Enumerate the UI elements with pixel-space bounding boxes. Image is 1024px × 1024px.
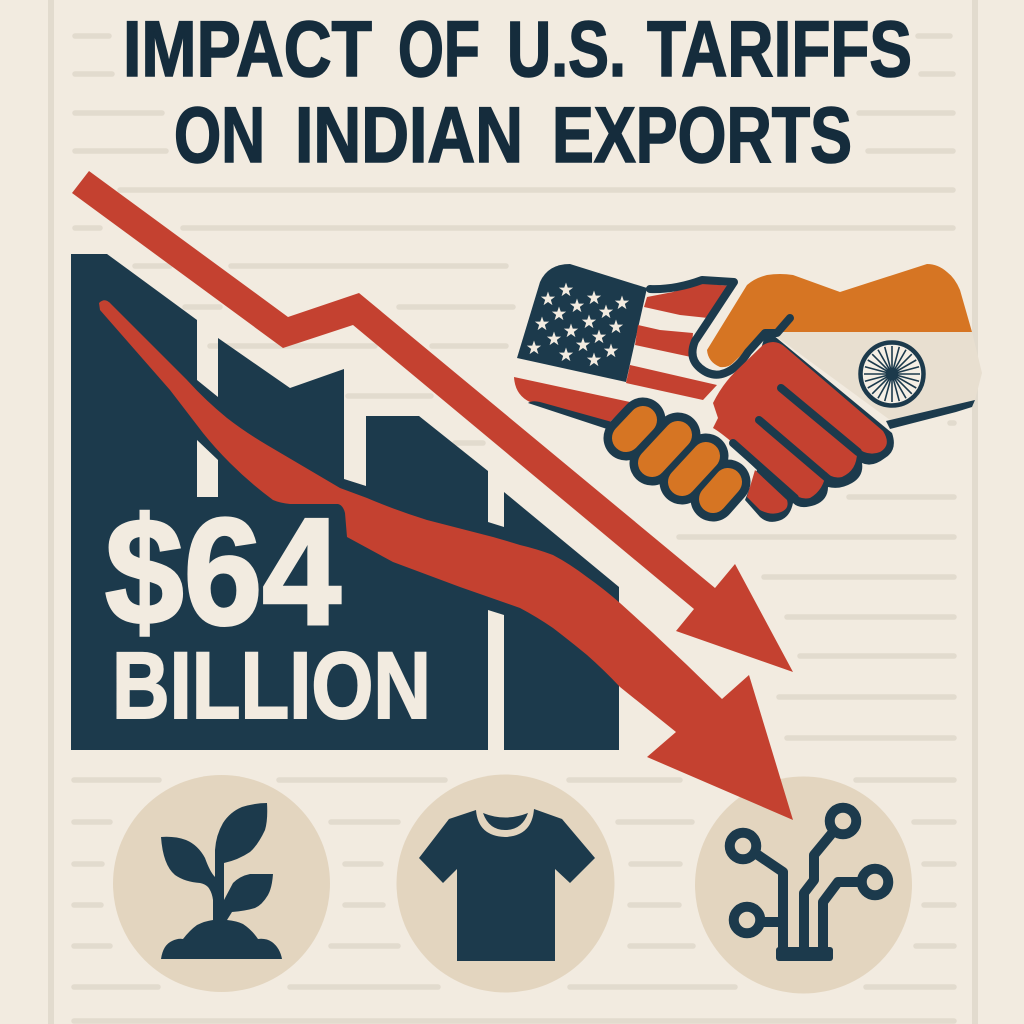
title: ON [174, 90, 265, 179]
title [123, 4, 912, 179]
title: INDIAN [295, 90, 523, 179]
right cuff line [886, 400, 975, 429]
Ashoka chakra wheel [860, 342, 924, 406]
arrow: upper falling trend line [72, 171, 793, 672]
US flag stars [527, 282, 629, 366]
big number: $64 billion: $64 [105, 487, 341, 657]
title: IMPACT [123, 4, 372, 93]
title: U.S. [507, 4, 626, 93]
title: OF [398, 4, 480, 93]
India hand lower finger [747, 470, 788, 514]
icon: electronics circuit [695, 776, 912, 994]
big number: $64 billion: BILLION [112, 633, 431, 739]
illustration: U.S.-India handshake [514, 264, 982, 522]
India flag sleeve: saffron band [707, 264, 972, 367]
US flag red stripes [514, 283, 730, 422]
India flag sleeve: white band [770, 332, 982, 420]
US hand fingers [626, 420, 728, 499]
India hand outline [733, 330, 894, 522]
arrow: lower falling ribbon [99, 300, 793, 820]
icon: agriculture plant [113, 775, 330, 992]
finger separators [733, 388, 858, 498]
US flag canton [517, 264, 647, 382]
bar chart: declining export silhouette [71, 254, 619, 750]
big number: $64 billion [105, 487, 431, 739]
icon: textile t-shirt [396, 774, 614, 992]
thumb and flag outline [650, 280, 790, 375]
title: EXPORTS [552, 90, 852, 179]
India hand red fill [713, 342, 887, 498]
title: TARIFFS [647, 4, 912, 93]
left cuff line [528, 401, 612, 430]
